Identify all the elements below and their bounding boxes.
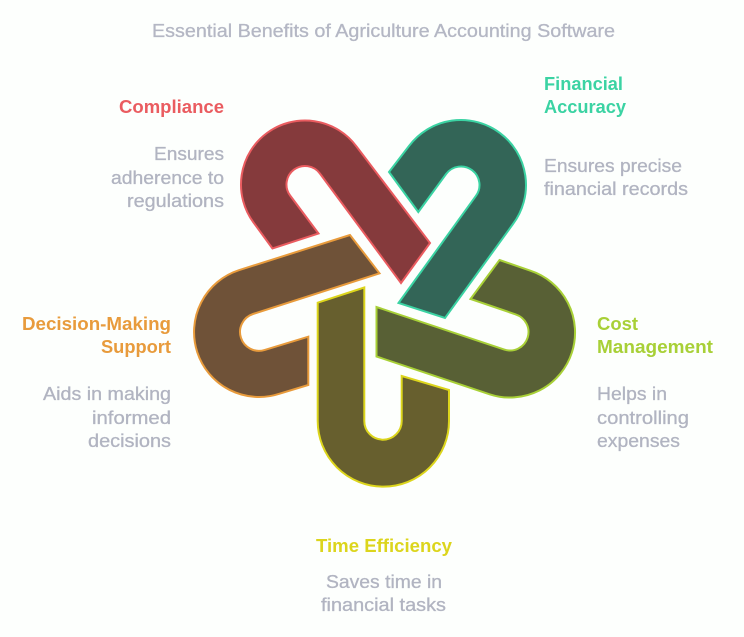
heading: cost management: [597, 314, 713, 357]
heading: compliance: Compliance: [119, 97, 224, 117]
text: decision-making description: [43, 384, 171, 451]
text: decision-making description: informed: [92, 408, 171, 428]
text: time efficiency description: [321, 572, 446, 615]
label: cost management: [597, 314, 713, 451]
label: financial accuracy: [544, 74, 688, 199]
title: Essential Benefits of Agriculture Accounting Software: [152, 21, 615, 41]
segment: time efficiency (yellow): [318, 288, 449, 487]
segment: decision-making support (orange): [194, 235, 380, 397]
text: compliance description: [111, 144, 224, 211]
segment: financial accuracy (green): [389, 120, 526, 318]
knot diagram: [194, 120, 575, 487]
text: decision-making description: Aids in making: [43, 384, 171, 404]
heading: financial accuracy: [544, 74, 626, 117]
text: cost management description: controlling: [597, 408, 689, 428]
label: time efficiency: [316, 536, 452, 615]
text: compliance description: regulations: [127, 191, 224, 211]
heading: decision-making support: Decision-Making: [22, 314, 171, 334]
text: financial accuracy description: [544, 156, 688, 199]
segment: cost management (olive green): [376, 260, 575, 398]
text: time efficiency description: financial tasks: [321, 595, 446, 615]
text: decision-making description: decisions: [88, 431, 171, 451]
text: financial accuracy description: financial records: [544, 179, 688, 199]
heading: financial accuracy: Accuracy: [544, 97, 626, 117]
text: cost management description: [597, 384, 689, 451]
heading: time efficiency: Time Efficiency: [316, 536, 452, 556]
text: cost management description: expenses: [597, 431, 680, 451]
heading: cost management: Cost: [597, 314, 638, 334]
heading: financial accuracy: Financial: [544, 74, 623, 94]
heading: cost management: Management: [597, 337, 713, 357]
text: compliance description: adherence to: [111, 168, 224, 188]
label: compliance: [111, 97, 224, 211]
segment: compliance (red): [241, 120, 430, 283]
label: decision-making support: [22, 314, 171, 451]
text: financial accuracy description: Ensures precise: [544, 156, 682, 176]
heading: decision-making support: Support: [101, 337, 171, 357]
text: cost management description: Helps in: [597, 384, 667, 404]
heading: decision-making support: [22, 314, 171, 357]
text: compliance description: Ensures: [154, 144, 224, 164]
text: time efficiency description: Saves time in: [326, 572, 442, 592]
